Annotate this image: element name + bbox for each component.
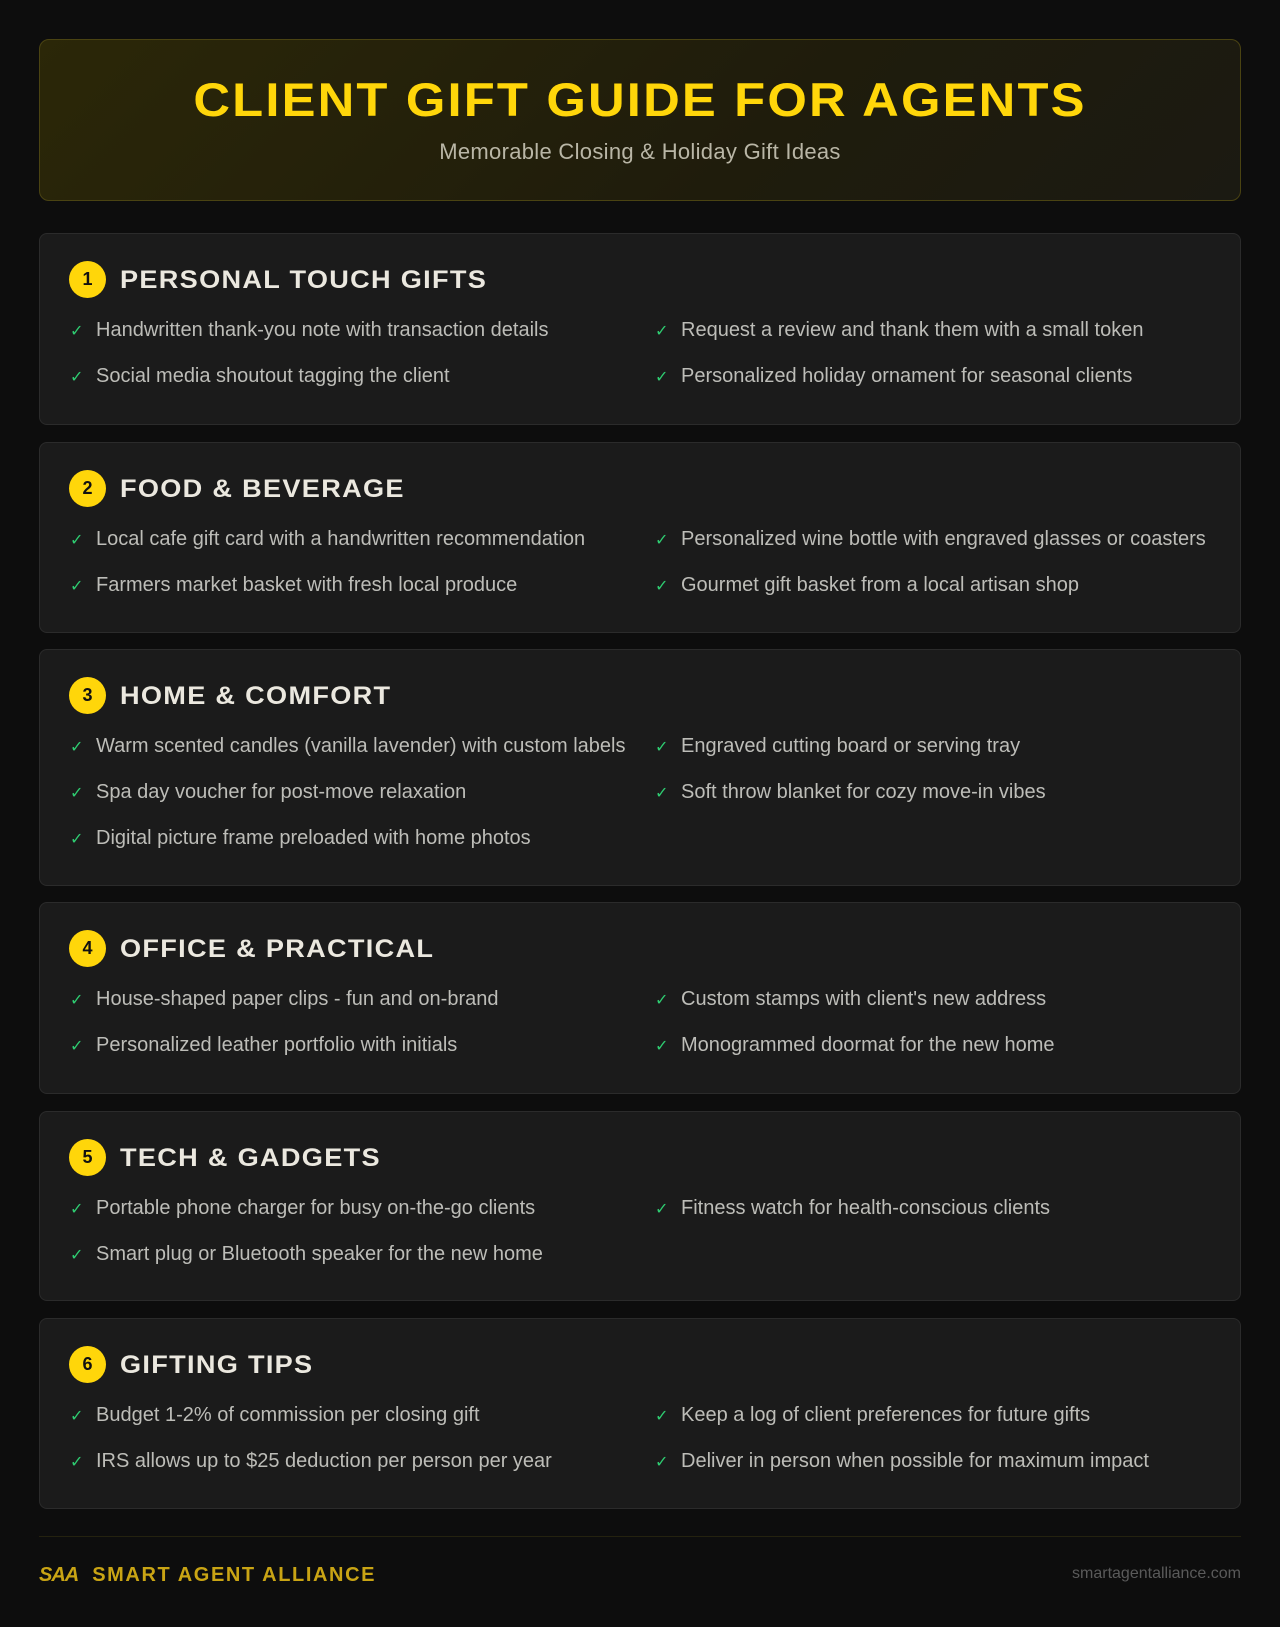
panel: gifting tips [39,1318,1241,1509]
panel: food & beverage: ✓ [70,532,83,549]
panel: food & beverage [39,442,1241,633]
panel: gifting tips: ✓ [655,1454,668,1471]
icon: number 6 [69,1346,106,1383]
heading: TECH & GADGETS [120,1144,381,1172]
panel: gifting tips: ✓ [70,1454,83,1471]
item: Monogrammed doormat for the new home [681,1034,1055,1056]
panel: office & practical: ✓ [655,1038,668,1055]
panel: office & practical: ✓ [70,1038,83,1055]
panel: tech & gadgets [39,1111,1241,1301]
heading: FOOD & BEVERAGE [120,475,405,503]
panel: home & comfort: ✓ [655,739,668,756]
item: Gourmet gift basket from a local artisan shop [681,574,1079,596]
panel: home & comfort: ✓ [655,785,668,802]
heading: PERSONAL TOUCH GIFTS [120,266,487,294]
icon: number 6: 6 [82,1354,92,1374]
item: Digital picture frame preloaded with home photos [96,827,531,849]
title: CLIENT GIFT GUIDE FOR AGENTS [193,73,1087,126]
icon: number 1 [69,261,106,298]
icon: number 4 [69,930,106,967]
panel: office & practical: ✓ [70,992,83,1009]
icon: number 1: 1 [82,269,92,289]
icon: number 3 [69,677,106,714]
panel: home & comfort [39,649,1241,886]
panel: tech & gadgets: ✓ [70,1201,83,1218]
heading: OFFICE & PRACTICAL [120,935,434,963]
item: Handwritten thank-you note with transaction details [96,319,548,341]
footer url: smartagentalliance.com [1072,1565,1241,1582]
panel: office & practical [39,902,1241,1094]
panel: tech & gadgets: ✓ [70,1247,83,1264]
item: Personalized wine bottle with engraved glasses or coasters [681,528,1206,550]
panel: gifting tips: ✓ [70,1408,83,1425]
item: Budget 1-2% of commission per closing gift [96,1404,480,1426]
item: Farmers market basket with fresh local produce [96,574,517,596]
icon: number 3: 3 [82,685,92,705]
item: Engraved cutting board or serving tray [681,735,1020,757]
panel: office & practical: ✓ [655,992,668,1009]
icon: number 4: 4 [82,938,92,958]
item: Deliver in person when possible for maximum impact [681,1450,1149,1472]
subtitle: Memorable Closing & Holiday Gift Ideas [439,139,841,164]
panel: food & beverage: ✓ [655,532,668,549]
item: Local cafe gift card with a handwritten recommendation [96,528,585,550]
panel: home & comfort: ✓ [70,739,83,756]
item: Custom stamps with client's new address [681,988,1046,1010]
panel: home & comfort: ✓ [70,831,83,848]
heading: HOME & COMFORT [120,682,391,710]
item: Request a review and thank them with a small token [681,319,1143,341]
item: House-shaped paper clips - fun and on-brand [96,988,498,1010]
item: Smart plug or Bluetooth speaker for the new home [96,1243,543,1265]
panel: gifting tips: ✓ [655,1408,668,1425]
panel: food & beverage: ✓ [655,578,668,595]
panel: tech & gadgets: ✓ [655,1201,668,1218]
item: Soft throw blanket for cozy move-in vibes [681,781,1046,803]
panel: personal touch gifts: ✓ [70,323,83,340]
icon: number 5: 5 [82,1147,92,1167]
panel: personal touch gifts: ✓ [655,323,668,340]
panel: personal touch gifts: ✓ [655,369,668,386]
item: IRS allows up to $25 deduction per person per year [96,1450,552,1472]
item: Portable phone charger for busy on-the-go clients [96,1197,535,1219]
icon: number 2: 2 [82,478,92,498]
item: Personalized leather portfolio with initials [96,1034,457,1056]
heading: GIFTING TIPS [120,1351,313,1379]
footer logo: SAA SMART AGENT ALLIANCE [39,1564,376,1586]
panel: personal touch gifts [39,233,1241,425]
item: Social media shoutout tagging the client [96,365,450,387]
item: Spa day voucher for post-move relaxation [96,781,466,803]
panel: home & comfort: ✓ [70,785,83,802]
panel: personal touch gifts: ✓ [70,369,83,386]
item: Fitness watch for health-conscious clients [681,1197,1050,1219]
header banner [39,39,1241,201]
item: Personalized holiday ornament for seasonal clients [681,365,1132,387]
item: Keep a log of client preferences for future gifts [681,1404,1090,1426]
icon: number 5 [69,1139,106,1176]
panel: food & beverage: ✓ [70,578,83,595]
icon: number 2 [69,470,106,507]
item: Warm scented candles (vanilla lavender) with custom labels [96,735,625,757]
